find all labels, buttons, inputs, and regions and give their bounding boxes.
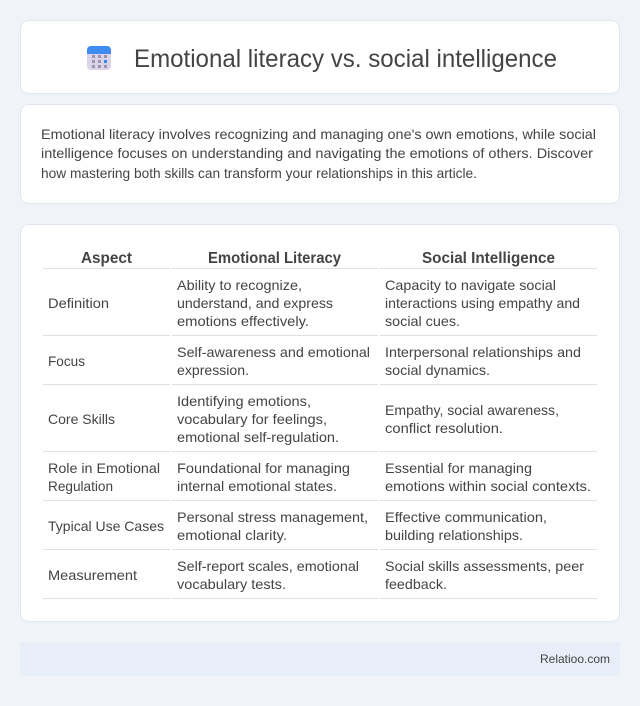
row: role in emotional regulation: internal emotional states. [177, 478, 337, 494]
panel: comparison table [20, 224, 620, 622]
row: measurement: Self-report scales, emotional [177, 558, 359, 574]
panel: title header [20, 20, 620, 94]
row: definition: Definition [48, 295, 109, 311]
row: core skills: Core Skills [48, 411, 115, 427]
row: measurement: feedback. [385, 576, 447, 592]
row: measurement: vocabulary tests. [177, 576, 286, 592]
row: definition: emotions effectively. [177, 313, 309, 329]
row: typical use cases: Typical Use Cases [48, 518, 164, 534]
row: core skills: conflict resolution. [385, 420, 503, 436]
row: measurement: Social skills assessments, peer [385, 558, 584, 574]
row: role in emotional regulation: Foundational for managing [177, 460, 350, 476]
row: focus [48, 344, 581, 378]
table header row [81, 250, 555, 267]
row: core skills [48, 393, 559, 445]
row: definition: Ability to recognize, [177, 277, 302, 293]
row: typical use cases: building relationships. [385, 527, 523, 543]
row: definition: social cues. [385, 313, 460, 329]
text block: introduction: intelligence focuses on understanding and navigating the emotions of others. Discover [41, 145, 593, 161]
row: core skills: Empathy, social awareness, [385, 402, 559, 418]
row: role in emotional regulation: emotions within social contexts. [385, 478, 591, 494]
row: definition [48, 277, 580, 329]
row: role in emotional regulation: Regulation [48, 478, 113, 494]
row: focus: social dynamics. [385, 362, 490, 378]
text block: introduction: how mastering both skills can transform your relationships in this article. [41, 165, 477, 181]
table header row: Social Intelligence [422, 250, 555, 267]
row: role in emotional regulation: Role in Emotional [48, 460, 160, 476]
row: measurement: Measurement [48, 567, 137, 583]
table header row: Emotional Literacy [208, 250, 341, 267]
icon: calendar [87, 46, 111, 70]
row: focus: expression. [177, 362, 249, 378]
row: role in emotional regulation: Essential for managing [385, 460, 532, 476]
row: typical use cases: Effective communication, [385, 509, 547, 525]
table header row: Aspect [81, 250, 133, 267]
row: focus: Self-awareness and emotional [177, 344, 370, 360]
row: core skills: emotional self-regulation. [177, 429, 339, 445]
row: role in emotional regulation [48, 460, 591, 494]
row: measurement [48, 558, 584, 592]
row: typical use cases: Personal stress management, [177, 509, 368, 525]
panel: introduction [20, 104, 620, 204]
title: Emotional literacy vs. social intelligence [134, 45, 557, 73]
text block: introduction [41, 126, 596, 181]
row: typical use cases [48, 509, 547, 543]
row: typical use cases: emotional clarity. [177, 527, 287, 543]
footer: Relatioo.com [540, 652, 610, 666]
row: core skills: vocabulary for feelings, [177, 411, 327, 427]
text block: introduction: Emotional literacy involves recognizing and managing one's own emotions, while social [41, 126, 596, 142]
footer [20, 642, 620, 676]
row: definition: interactions using empathy and [385, 295, 580, 311]
row: focus: Focus [48, 353, 85, 369]
row: core skills: Identifying emotions, [177, 393, 311, 409]
row: definition: understand, and express [177, 295, 333, 311]
row: definition: Capacity to navigate social [385, 277, 556, 293]
row: focus: Interpersonal relationships and [385, 344, 581, 360]
